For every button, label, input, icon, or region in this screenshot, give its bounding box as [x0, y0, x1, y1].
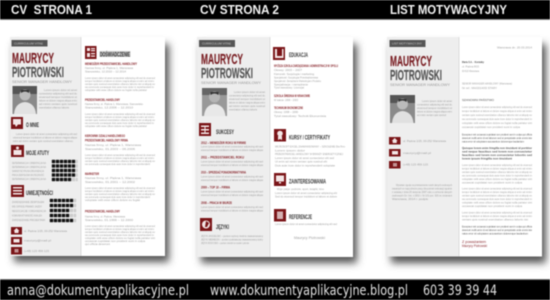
- text block: job 4: Nazwa firmy, ul. Piękna 1, Warszawa: [85, 176, 141, 180]
- text block: job 4: voluptate velit esse cillum dolore eu fugiat: [85, 198, 140, 202]
- icon: certificates: [274, 129, 286, 142]
- name: PIOTROWSKI: [201, 65, 253, 82]
- text block: job 4: MARKETER: [85, 172, 100, 176]
- text block: job 5: Lorem ipsum dolor sit amet consectetur adipiscing elit sed do eiusmod: [85, 224, 155, 228]
- text block: job 3: veniam quis nostrud exercitation ullamco laboris nisi ut aliquip ex: [85, 159, 155, 163]
- text block: achievements list: Lorem ipsum dolor sit amet consectetur adipiscing elit sed: [201, 144, 263, 148]
- text block: job 5: ea commodo consequat duis aute irure dolor in reprehenderit in: [85, 233, 154, 237]
- icon: achievements: [199, 123, 211, 136]
- text block: achievements list: eiusmod tempor incididunt ut labore et dolore magna aliqua: [201, 193, 263, 197]
- text block: languages: [201, 234, 263, 245]
- photo: [202, 88, 227, 116]
- text block: addressee: SENIOR MANAGER HANDLOWY (Warszawa): [462, 82, 512, 86]
- text block: job 5: Nazwa firmy, ul. Piękna, Warszawa: [85, 214, 125, 218]
- text block: job 1: tempor incididunt ut labore et dolore magna aliqua ut enim ad minim: [85, 79, 154, 83]
- text block: intro: ad minim veniam quis nostrud: [229, 104, 265, 108]
- text block: achievements list: Lorem ipsum dolor sit amet consectetur adipiscing elit sed: [201, 160, 263, 164]
- text block: job 2: Lorem ipsum dolor sit amet consectetur adipiscing elit sed do eiusmod: [85, 112, 155, 116]
- tag: [390, 40, 426, 47]
- name: [390, 53, 450, 87]
- heading: doswiadczenie: DOŚWIADCZENIE: [100, 50, 130, 59]
- text block: job 1: voluptate velit esse cillum dolore eu fugiat nulla pariatur: [85, 88, 147, 92]
- text block: achievements list: Lorem ipsum dolor sit amet consectetur adipiscing elit sed: [201, 190, 263, 194]
- text block: addressee: 00-522 Warszawa: [462, 69, 479, 73]
- text block: job 2: ea commodo consequat duis aute irure dolor in reprehenderit in: [85, 121, 154, 125]
- text block: job 5: PRZEDSTAWICIEL HANDLOWY: [85, 210, 121, 214]
- text block: job 5: Stanowisko, 01.1999 – 12.2000: [85, 218, 133, 222]
- text block: achievements list: 2011 – PRZEDSTAWICIEL ROKU: [201, 156, 245, 160]
- text block: intro: consectetur adipiscing elit sed do: [39, 92, 77, 96]
- text block: letter body: veniam quis nostrud exercitation ullamco laboris nisi ut aliquip ex: [462, 170, 532, 174]
- icon: strengths: [11, 145, 24, 157]
- text block: job 2: PRZEDSTAWICIEL HANDLOWY: [85, 98, 121, 102]
- text block: strengths: DETERMINACJA I ORIENTACJA NA: [12, 177, 46, 181]
- text block: intro: labore et dolore magna aliqua enim: [39, 98, 77, 102]
- date: Warszawa dn. 20.03.2014: [497, 46, 532, 50]
- text block: job 2: Stanowisko, 12.2006 – 12.2010: [85, 106, 133, 110]
- text block: job 2: [85, 98, 155, 128]
- text block: skills: ZARZĄDZANIE ZESPOŁEM: [12, 200, 44, 204]
- text block: letter body: veniam quis nostrud exercitation ullamco laboris nisi ut aliquip ex: [462, 194, 532, 198]
- text block: intro: labore et dolore magna aliqua enim: [229, 100, 265, 104]
- text block: achievements list: 2009 – TOP 10 – FIRMA: [201, 186, 231, 190]
- text block: courses: Lorem ipsum dolor sit amet consectetur elit sed: [275, 156, 334, 160]
- text block: languages: JĘZYK ANGIELSKI – poziom wyższy średnio zaawansowany: [201, 234, 263, 238]
- text block: courses: Lorem ipsum dolor: [275, 148, 305, 152]
- heading: zainteresowania: ZAINTERESOWANIA: [289, 178, 326, 186]
- contact details: maurycy@mail.pl: [24, 238, 51, 242]
- text block: letter body: voluptate velit esse cillum dolore eu fugiat nulla pariatur sint: [462, 200, 532, 204]
- text block: strengths: DETERMINACJA I ORIENTACJA NA: [12, 161, 46, 165]
- name: [12, 50, 72, 84]
- text block: achievements list: eiusmod tempor incididunt ut labore et dolore magna aliqua: [201, 148, 263, 152]
- text block: job 4: tempor incididunt ut labore et dolore magna aliqua ut enim ad minim: [85, 189, 154, 193]
- name: MAURYCY: [390, 53, 432, 70]
- text block: achievements list: eiusmod tempor incididunt ut labore et dolore magna aliqua: [201, 163, 263, 167]
- icon: education: [273, 47, 285, 60]
- text block: intro: consectetur adipiscing elit sed do: [229, 94, 265, 98]
- text block: job 2: tempor incididunt ut labore et dolore magna aliqua ut enim ad minim: [85, 115, 154, 119]
- text block: education: TECHNIKUM EKONOMICZNE: [274, 106, 303, 110]
- icon: languages: [200, 218, 212, 231]
- text block: job 3: tempor incididunt ut labore et dolore magna aliqua ut enim ad minim: [85, 156, 154, 160]
- text block: achievements list: eiusmod tempor incididunt ut labore et dolore magna aliqua: [201, 208, 263, 212]
- text block: job 3: Nazwa firmy, ul. Piękna 1, Warszawa: [85, 143, 141, 147]
- text block: letter body: tempor incididunt ut labore et dolore magna aliqua ut enim ad minim: [462, 109, 532, 113]
- text block: education: Okresy: 1998 – 1999: [274, 110, 298, 114]
- text block: job 3: PRZEDSTAWICIEL HANDLOWY FIRMA: [85, 138, 129, 142]
- contact details: ul. Piękna 1/25, 00-252 Warszawa: [403, 139, 446, 143]
- heading: edukacja: EDUKACJA: [289, 52, 308, 59]
- name: [201, 51, 261, 85]
- text block: job 5: tempor incididunt ut labore et dolore magna aliqua ut enim ad minim: [85, 227, 154, 231]
- text block: education: SZKOŁA ŚREDNIA W KRAKOWIE: [274, 93, 310, 98]
- text block: intro: labore et dolore magna aliqua enim: [417, 110, 452, 114]
- text block: achievements list: Lorem ipsum dolor sit amet consectetur adipiscing elit sed: [201, 174, 263, 178]
- text block: note: Wyrażam zgodę na przetwarzanie moich danych osobowych: [396, 183, 452, 187]
- contact: website: www.dokumentyaplikacyjne.blog.pl: [210, 283, 408, 299]
- heading: referencje: REFERENCJE: [289, 214, 312, 221]
- text block: note: zawartych w mojej ofercie pracy dla potrzeb rekrutacji zgodnie: [392, 186, 452, 190]
- heading: moje atuty: MOJE ATUTY: [26, 150, 49, 157]
- contact details: (+48) 123 456 123: [403, 162, 428, 166]
- text block: letter body: ea commodo consequat duis aute irure dolor in reprehenderit in: [462, 117, 532, 121]
- signature: Maurycy Piotrowski: [294, 236, 325, 240]
- text block: education: [274, 64, 338, 118]
- text block: job 1: ea commodo consequat duis aute irure dolor in reprehenderit in: [85, 85, 154, 89]
- text block: letter body: Quisque lorem enim fringilla non tincidunt id porttitor: [462, 146, 533, 150]
- text block: interests: Moje pasje: podróże, sport, książki, kino: [277, 187, 324, 191]
- contact details: (+48) 123 456 123: [24, 249, 49, 253]
- tag: [12, 40, 48, 46]
- icon: references: [274, 209, 286, 222]
- text block: job 1: [85, 62, 155, 92]
- text block: job 5: qui officia deserunt: [85, 242, 110, 246]
- text block: letter body: veniam quis nostrud exercitation ullamco laboris nisi ut aliquip ex: [462, 113, 532, 117]
- text block: education: Tytuł zawodowy: Technik Ekonomista: [274, 114, 326, 118]
- text block: job 4: Stanowisko, 01.2001 – 12.2002: [85, 180, 135, 184]
- name: SENIOR MANAGER HANDLOWY: [201, 80, 261, 85]
- text block: closing: Maurycy Piotrowski: [462, 244, 487, 248]
- text block: strengths: SAMODYSCYPLINA ORGANIZACJA: [12, 169, 44, 173]
- text block: job 3: Lorem ipsum dolor sit amet consectetur adipiscing elit sed do eiusmod: [85, 153, 155, 157]
- text block: education: Okresy: 2003 – 2007: [274, 68, 302, 72]
- text block: job 1: Stanowisko, 12.2010 – 12.2014: [85, 70, 126, 74]
- text block: interests: [275, 187, 337, 198]
- text block: letter body: natus error sit voluptatem accusantium doloremque laudantium: [462, 140, 524, 144]
- text block: strengths: PRACA ZESPOŁOWA SKUTECZNOŚĆ: [12, 172, 44, 177]
- heading: o mnie: O MNIE: [26, 122, 39, 129]
- name: PIOTROWSKI: [12, 64, 64, 81]
- text block: intro: [417, 99, 452, 117]
- text block: intro: Lorem ipsum dolor sit amet: [234, 90, 265, 94]
- text block: letter heading: SZANOWNI PAŃSTWO: [462, 98, 495, 102]
- text block: closing: Z poważaniem: [462, 240, 486, 244]
- text block: strengths: DETERMINACJA I ORIENTACJA NA: [12, 165, 46, 169]
- icon: experience: [85, 46, 96, 59]
- text block: job 1: MENEDŻER PRZEDSTAWICIEL HANDLOWY: [85, 62, 138, 66]
- chart: skills dots: [50, 199, 76, 222]
- text block: addressee: ul. Piękna 8/15: [462, 64, 479, 68]
- heading: umiejetnosci: UMIEJĘTNOŚCI: [26, 188, 53, 197]
- text block: letter body: ea commodo consequat duis aute irure dolor in reprehenderit in: [462, 174, 532, 178]
- contact details: [389, 137, 446, 168]
- text block: letter body: tempor incididunt ut labore et dolore magna aliqua ut enim ad minim: [462, 214, 532, 218]
- tag: CURRICULUM VITAE: [14, 42, 43, 46]
- text block: intro: ad minim veniam quis nostrud: [39, 102, 77, 106]
- text block: courses: [275, 144, 345, 168]
- text block: addressee: Maria S.A. - Kontakty: [462, 60, 484, 64]
- text block: skills: ZARZĄDZANIE PROJEKTAMI: [12, 218, 45, 222]
- heading: doswiadczenie: [100, 50, 130, 59]
- text block: references: Lorem ipsum dolor sit amet consectetur adipiscing elit sed: [275, 222, 337, 226]
- text block: letter body: occaecat cupidatat non proident sunt in culpa: [462, 125, 520, 129]
- text block: job 5: voluptate velit esse cillum dolore eu fugiat nulla pariatur sint: [85, 236, 155, 240]
- text block: about: [13, 132, 77, 143]
- text block: job 5: occaecat cupidatat non proident sunt in culpa: [85, 239, 145, 243]
- text block: education: Specjalność: Zarządzanie Marketingiem Produktu: [274, 79, 321, 83]
- photo: [390, 95, 415, 123]
- panel: CV page 2: [197, 37, 357, 263]
- text block: achievements list: eiusmod tempor incididunt ut labore et dolore magna aliqua: [201, 178, 263, 182]
- chart: strengths dots: [52, 160, 78, 181]
- text block: intro: Lorem ipsum dolor sit amet: [422, 99, 452, 103]
- icon: interests: [274, 173, 286, 186]
- text block: intro: consectetur adipiscing elit sed do: [417, 102, 452, 106]
- text block: letter body: natus error sit voluptatem accusantium doloremque laudantium: [462, 232, 528, 236]
- icon: about: [11, 117, 23, 129]
- text block: letter body: veniam quis nostrud exercitation ullamco laboris nisi: [462, 218, 528, 222]
- text block: courses: Duis aute irure dolor in reprehenderit voluptate: [275, 164, 335, 168]
- text block: achievements list: 2012 – MENEDŻER ROKU W FIRMIE: [201, 141, 246, 145]
- text block: education: WYŻSZA SZKOŁA ZARZĄDZANIA I ADMINISTRACJI W OPOLU: [274, 64, 338, 68]
- text block: achievements list: Lorem ipsum dolor sit amet consectetur adipiscing elit sed: [201, 205, 263, 209]
- icon: skills: [11, 185, 24, 197]
- tag: [199, 40, 235, 47]
- text block: closing: [462, 240, 487, 248]
- text block: intro: eiusmod tempor incididunt ut: [39, 95, 77, 99]
- name: MAURYCY: [201, 51, 243, 68]
- text block: letter body: occaecat cupidatat non proident sunt in culpa: [462, 180, 522, 184]
- text block: intro: Lorem ipsum dolor sit amet: [44, 88, 77, 92]
- text block: education: Kierunek: Socjologia i marketing: [274, 72, 314, 76]
- text block: job 4: veniam quis nostrud exercitation ullamco laboris nisi ut aliquip ex: [85, 192, 155, 196]
- text block: letter body: voluptate velit esse cillum dolore eu fugiat nulla pariatur sint: [462, 121, 532, 125]
- text block: job 1: veniam quis nostrud exercitation ullamco laboris nisi ut aliquip ex: [85, 82, 155, 86]
- text block: interests: Sed do eiusmod tempor incididunt ut labore et dolore: [275, 194, 337, 198]
- text block: intro: eiusmod tempor incididunt ut: [229, 97, 265, 101]
- text block: achievements list: 2008 – PRACA W BIURZE: [201, 201, 232, 205]
- text block: intro: exercitation ullamco laboris: [229, 108, 257, 112]
- text block: skills: KOMUNIKATYWNOŚĆ ANALIZA: [12, 212, 42, 218]
- text block: job 4: [85, 172, 155, 202]
- text block: courses: Ut enim ad minim veniam quis nostrud elit: [275, 160, 327, 164]
- text block: intro: eiusmod tempor incididunt ut: [417, 106, 452, 110]
- text block: letter body: voluptate velit esse cillum dolore eu fugiat nulla pariatur sint: [462, 177, 532, 181]
- text block: note: osobowych Dz. Ust. z 2002 r. Nr 101 poz. 926 ze zmianami: [392, 194, 452, 198]
- text block: letter body: tempor incididunt ut labore et dolore magna aliqua ut enim ad minim: [462, 190, 532, 194]
- text block: job 4: Lorem ipsum dolor sit amet consectetur adipiscing elit sed do eiusmod: [85, 186, 155, 190]
- text block: intro: exercitation ullamco laboris: [39, 106, 69, 110]
- text block: note: Warszawa, 2014 r. podpis: [392, 197, 429, 201]
- text block: intro: [229, 90, 265, 112]
- footer bar: [0, 279, 550, 300]
- name: PIOTROWSKI: [390, 67, 442, 84]
- text block: education: W trakcie: 1999 – 2003: [274, 98, 298, 102]
- text block: courses: MICROSOFT EXCEL ZAAWANSOWANY – SZKOLENIE Dla Firm: [275, 144, 345, 148]
- text block: job 2: veniam quis nostrud exercitation ullamco laboris nisi ut aliquip ex: [85, 118, 155, 122]
- photo: [12, 86, 37, 114]
- tag: CURRICULUM VITAE: [202, 42, 231, 46]
- text block: job 3: [85, 134, 155, 166]
- contact: phone: 603 39 39 44: [423, 283, 497, 299]
- text block: letter body: tempor incididunt ut labore et dolore magna aliqua ut enim ad minim: [462, 166, 532, 170]
- text block: job 2: voluptate velit esse cillum dolore eu fugiat nulla pariatur: [85, 124, 147, 128]
- text block: addressee: [462, 60, 512, 90]
- text block: interests: Lorem ipsum dolor sit amet consectetur adipiscing elit: [275, 191, 337, 195]
- text block: languages: JĘZYK ROSYJSKI – poziom średni w mowie i piśmie: [201, 241, 249, 245]
- contact details: [11, 227, 67, 254]
- text block: about: enim ad minim veniam quis nostrud exercitation ullamco: [13, 139, 73, 143]
- text block: about: Lorem ipsum dolor sit amet consectetur adipiscing elit sed: [16, 132, 77, 136]
- text block: letter body: [462, 105, 533, 236]
- text block: education: Specjalność: Socjologia Przedsiębiorstwa: [274, 76, 318, 80]
- heading: sukcesy: SUKCESY: [216, 129, 234, 136]
- text block: achievements list: 2010 – SPRZEDAŻ PONADNORMATYWNA: [201, 170, 246, 174]
- text block: intro: [39, 88, 77, 110]
- text block: job 3: KIEROWNIK DZIAŁU HANDLOWEGO: [85, 134, 125, 138]
- text block: strengths: [12, 161, 46, 181]
- text block: skills: MS OFFICE PRAWO JAZDY: [12, 204, 42, 208]
- tag: LIST MOTYWACYJNY: [392, 42, 422, 46]
- contact: email: anna@dokumentyaplikacyjne.pl: [7, 283, 189, 299]
- text block: achievements list: [201, 141, 263, 212]
- text block: courses: PRZEDSTAWICIEL HANDLOWY W BRANŻY ENERGETYCZNEJ: [275, 151, 343, 156]
- text block: education: Tytuł zawodowy: Licencjat: [274, 86, 304, 90]
- text block: job 3: ea commodo consequat duis aute irure dolor in reprehenderit: [85, 162, 150, 166]
- text block: job 1: Nazwa firmy, ul. Piękna 1, Warszawa: [85, 66, 133, 70]
- panel: cover letter: [387, 37, 546, 263]
- text block: skills: NEGOCJACJE I ORGANIZACJA: [12, 209, 46, 213]
- text block: letter body: lorem ipsum fringilla non tincidunt: [462, 156, 512, 160]
- text block: letter body: faucibus sed lorem non consectetur lobortis sed: [462, 153, 532, 157]
- panel: CV page 1: [10, 37, 169, 262]
- text block: skills: [12, 200, 46, 222]
- text block: letter body: occaecat cupidatat non proident sunt in culpa: [462, 204, 522, 208]
- text block: languages: JĘZYK NIEMIECKI – poziom podstawowy zaawansowany dobry: [201, 238, 263, 242]
- heading: CV strona 2: CV STRONA 2: [200, 3, 279, 17]
- text block: education: Specjalizacja: i zarządzanie: [274, 82, 308, 86]
- contact details: maurycy@mail.pl: [403, 151, 431, 155]
- text block: about: eiusmod tempor incididunt ut labore et dolore magna aliqua: [13, 136, 77, 140]
- text block: job 2: Nazwa firmy, ul. Piękna 1, Warszawa, Stanowisko: [85, 102, 143, 106]
- text block: job 4: ea commodo consequat duis aute irure dolor in reprehenderit: [85, 195, 150, 199]
- text block: job 5: veniam quis nostrud exercitation ullamco laboris nisi ut aliquip ex: [85, 230, 155, 234]
- name: MAURYCY: [12, 50, 54, 67]
- text block: letter body: sed neque faucibus sed lorem non consectetur: [462, 150, 533, 154]
- name: SENIOR MANAGER HANDLOWY: [390, 82, 450, 87]
- text block: intro: ad minim veniam quis nostrud: [417, 113, 446, 117]
- text block: addressee: Nr ref.: MH/2014/03 STARY: [462, 86, 497, 90]
- heading: list motywacyjny: LIST MOTYWACYJNY: [390, 3, 508, 17]
- text block: job 5: [85, 210, 155, 246]
- heading: CV strona 1: CV STRONA 1: [11, 3, 92, 17]
- contact details: ul. Piękna 1/25, 00-252 Warszawa: [24, 229, 67, 233]
- name: SENIOR MANAGER HANDLOWY: [12, 79, 72, 84]
- heading: kursy certyfikaty: KURSY / CERTYFIKATY: [289, 134, 330, 142]
- header bar: [0, 0, 550, 20]
- text block: note: z ustawą z dnia 29 sierpnia 1997 roku o ochronie danych: [392, 190, 452, 194]
- text block: job 3: Stanowisko, 01.2003 – 06.2006: [85, 147, 135, 151]
- heading: jezyki: JĘZYKI: [216, 224, 229, 231]
- text block: note: [392, 183, 452, 201]
- text block: letter body: ea commodo consequat duis aute irure dolor in reprehenderit in: [462, 197, 532, 201]
- text block: job 1: Lorem ipsum dolor sit amet consectetur adipiscing elit sed do eiusmod: [85, 76, 155, 80]
